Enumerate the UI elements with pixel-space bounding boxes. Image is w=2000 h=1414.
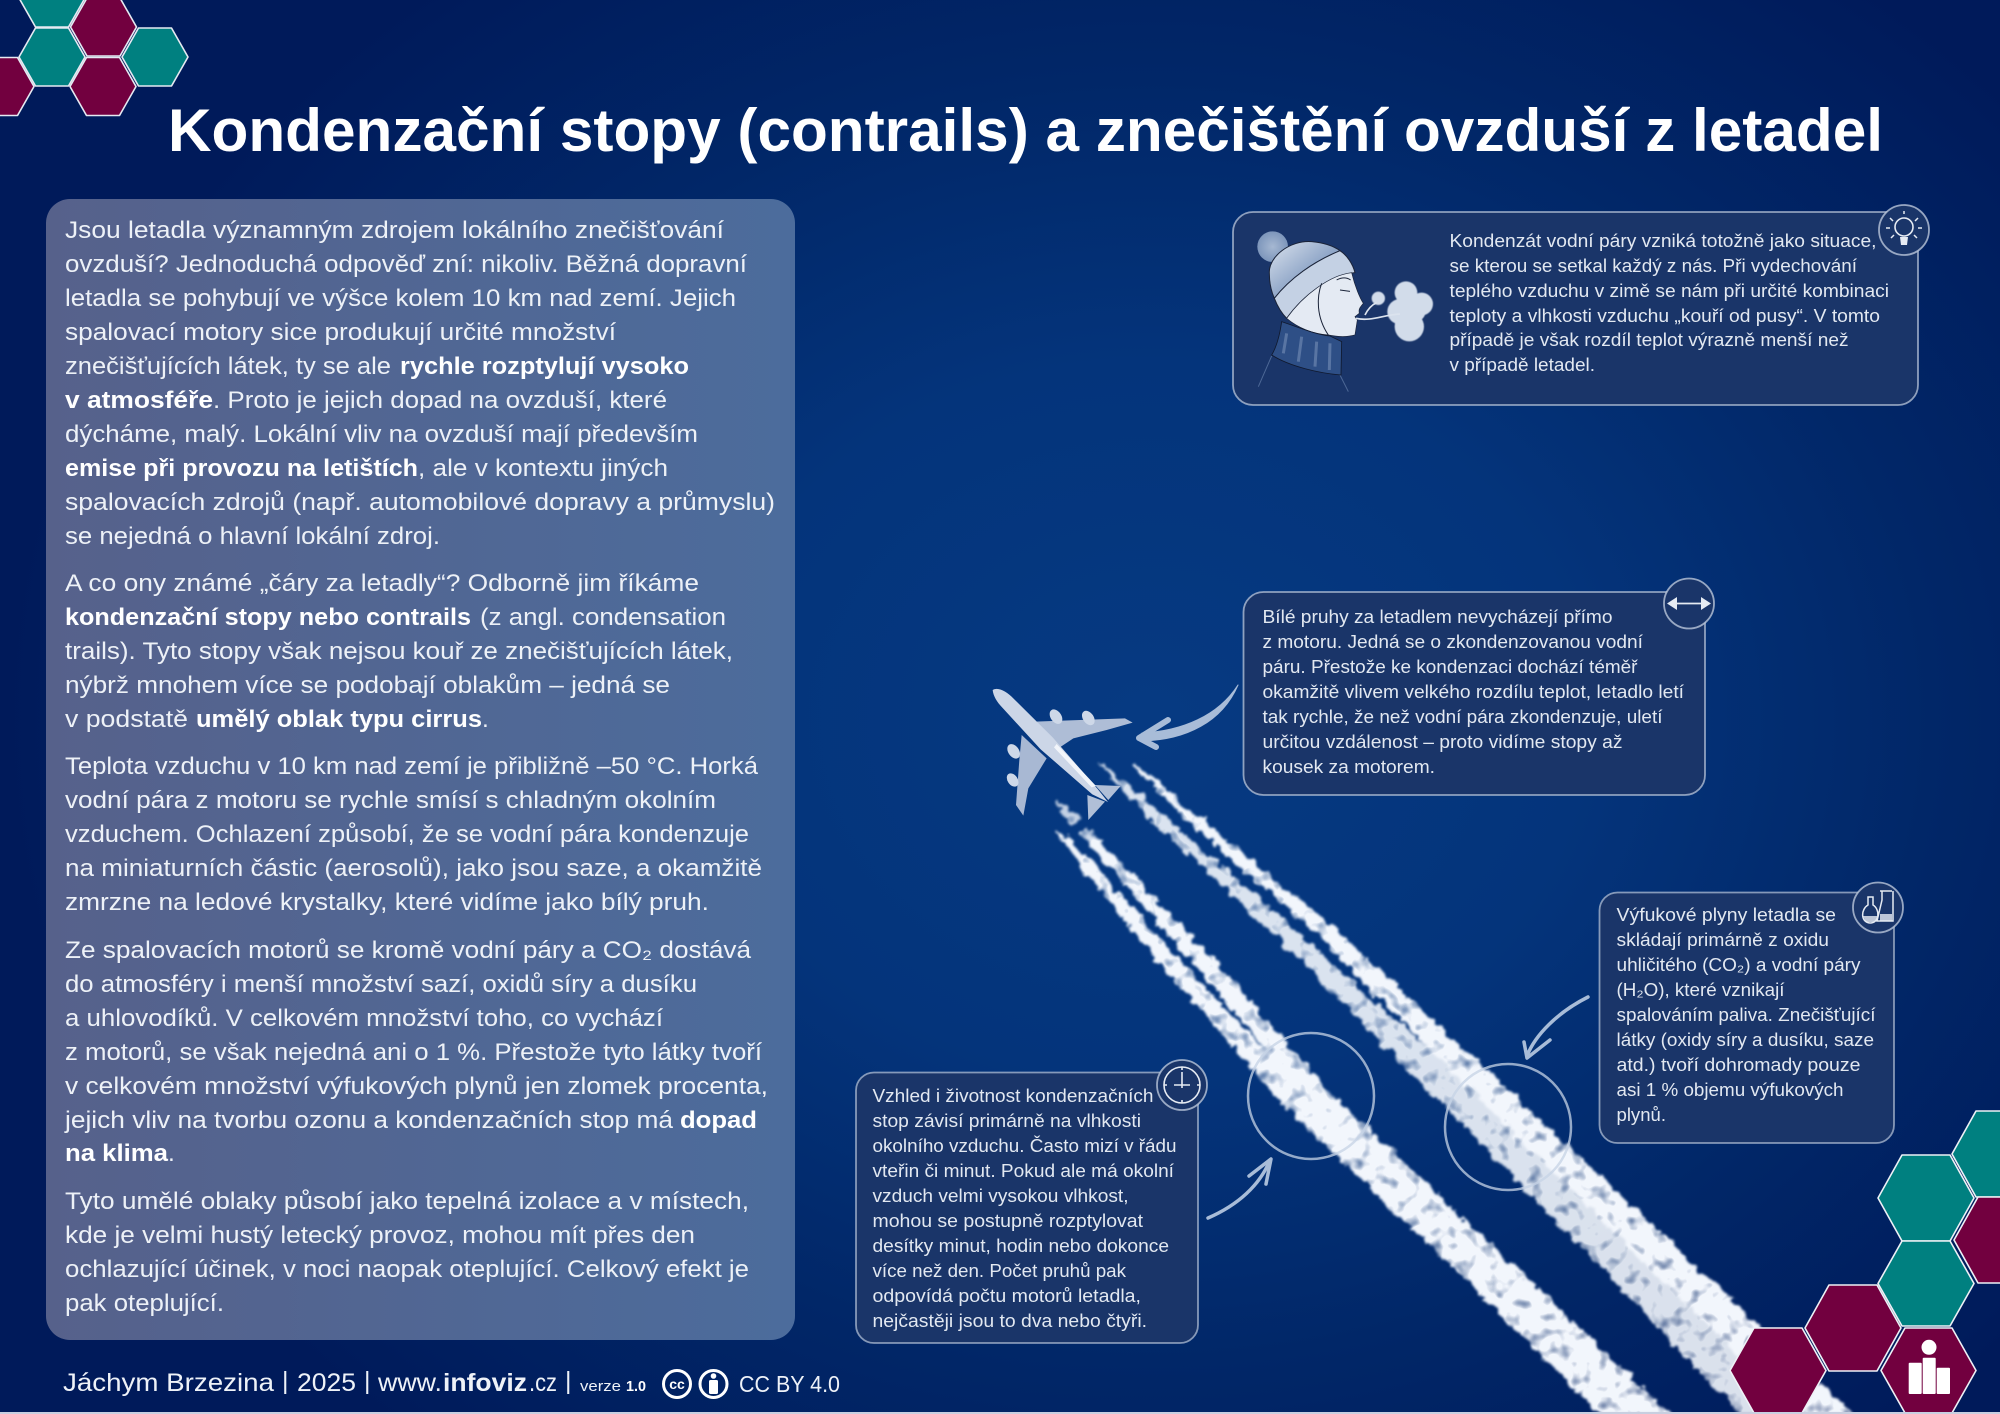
footer: | [565, 1367, 572, 1395]
text: se kterou se setkal každý z nás. Při vydechování [1450, 256, 1857, 276]
title: Kondenzační stopy (contrails) a znečištění ovzduší z letadel [168, 97, 1883, 164]
text: tak rychle, že než vodní pára zkondenzuje, uletí [1262, 707, 1662, 727]
fuselage [993, 689, 1108, 802]
hexagons: bottom right [1730, 1111, 2000, 1413]
paragraph: contrails definition: (z angl. condensation [480, 604, 726, 631]
paragraph: climate effect [65, 1188, 749, 1317]
icon: chemistry flasks [1853, 882, 1903, 932]
text: v případě letadel. [1450, 355, 1595, 375]
paragraph: emissions [64, 937, 768, 1167]
text: Výfukové plyny letadla se [1616, 905, 1836, 925]
callout: lifetime of contrails [856, 1060, 1207, 1343]
paragraph: temperature: Teplota vzduchu v 10 km nad zemí je přibližně –50 °C. Horká [65, 753, 758, 780]
text: Kondenzát vodní páry vzniká totožně jako situace, [1450, 231, 1876, 251]
text [1262, 607, 1684, 777]
text: teploty a vlhkosti vzduchu „kouří od pusy“. V tomto [1450, 306, 1880, 326]
paragraph: temperature: zmrzne na ledové krystalky, které vidíme jako bílý pruh. [65, 889, 709, 916]
text: mohou se postupně rozptylovat [872, 1211, 1143, 1231]
text: asi 1 % objemu výfukových [1616, 1080, 1844, 1100]
text [872, 1086, 1176, 1331]
text: páru. Přestože ke kondenzaci dochází téměř [1262, 657, 1639, 677]
paragraph: temperature: na miniaturních částic (aerosolů), jako jsou saze, a okamžitě [65, 855, 762, 882]
text: Bílé pruhy za letadlem nevycházejí přímo [1262, 607, 1612, 627]
text: látky (oxidy síry a dusíku, saze [1616, 1030, 1874, 1050]
paragraph: emissions: a uhlovodíků. V celkovém množství toho, co vychází [65, 1005, 663, 1032]
right wing [1035, 718, 1133, 748]
paragraph: local pollution: spalovací motory sice produkují určité množství [65, 319, 616, 346]
footer: | [364, 1367, 370, 1395]
paragraph: contrails definition: umělý oblak typu cirrus [196, 706, 482, 733]
callout: exhaust composition [1600, 882, 1903, 1143]
paragraph: local pollution: . Proto je jejich dopad na ovzduší, které [213, 387, 667, 414]
illustration: person exhaling in winter [1257, 231, 1433, 392]
callout: white stripes [1244, 578, 1714, 795]
paragraph: emissions: z motorů, se však nejedná ani o 1 %. Přestože tyto látky tvoří [65, 1039, 762, 1066]
text: (H₂O), které vznikají [1616, 980, 1784, 1000]
text: spalováním paliva. Znečišťující [1616, 1005, 1876, 1025]
footer: 2025 [297, 1369, 356, 1397]
paragraph: local pollution: v atmosféře [65, 387, 213, 414]
paragraph: emissions: do atmosféry i menší množství sazí, oxidů síry a dusíku [65, 971, 697, 998]
text: uhličitého (CO₂) a vodní páry [1616, 955, 1860, 975]
paragraph: contrails definition: A co ony známé „čáry za letadly“? Odborně jim říkáme [65, 570, 699, 597]
paragraph: local pollution: spalovacích zdrojů (např. automobilové dopravy a průmyslu) [65, 489, 775, 516]
text: Vzhled i životnost kondenzačních [872, 1086, 1154, 1106]
text: skládají primárně z oxidu [1616, 930, 1829, 950]
text: více než den. Počet pruhů pak [872, 1261, 1127, 1281]
hexagons: top left [0, 0, 188, 116]
arrow: to right circle [1524, 997, 1588, 1058]
paragraph: contrails definition: v podstatě [65, 706, 188, 733]
icon: light bulb [1879, 205, 1929, 255]
arrow: to airplane [1139, 685, 1238, 747]
left wing [1016, 735, 1047, 816]
icon: creative commons [664, 1370, 690, 1398]
paragraph: local pollution: emise při provozu na letištích [65, 455, 418, 482]
paragraph: contrails definition: kondenzační stopy nebo contrails [65, 604, 471, 631]
paragraph: temperature: vodní pára z motoru se rychle smísí s chladným okolním [65, 787, 716, 814]
paragraph: emissions: dopad [680, 1107, 757, 1134]
paragraph: climate effect: pak oteplující. [65, 1290, 224, 1317]
paragraph: contrails definition [65, 570, 733, 733]
paragraph: climate effect: Tyto umělé oblaky působí jako tepelná izolace a v místech, [65, 1188, 749, 1215]
text: desítky minut, hodin nebo dokonce [872, 1236, 1169, 1256]
paragraph: contrails definition: trails). Tyto stopy však nejsou kouř ze znečišťujících látek, [65, 638, 733, 665]
paragraph: local pollution: znečišťujících látek, ty se ale [65, 353, 391, 380]
paragraph: local pollution: rychle rozptylují vysoko [400, 353, 689, 380]
text [1616, 905, 1876, 1125]
paragraph: local pollution [65, 217, 775, 550]
text: okamžitě vlivem velkého rozdílu teplot, letadlo letí [1262, 682, 1684, 702]
paragraph: local pollution: letadla se pohybují ve výšce kolem 10 km nad zemí. Jejich [65, 285, 736, 312]
footer: CC BY 4.0 [739, 1371, 840, 1397]
logo hexagon [1881, 1328, 1976, 1413]
paragraph: local pollution: Jsou letadla významným zdrojem lokálního znečišťování [65, 217, 724, 244]
icon: clock [1157, 1060, 1207, 1110]
icon: double arrow [1664, 578, 1714, 628]
paragraph: climate effect: kde je velmi hustý letecký provoz, mohou mít přes den [65, 1222, 695, 1249]
paragraph: local pollution: , ale v kontextu jiných [418, 455, 668, 482]
callout: exhaling analogy [1233, 205, 1929, 405]
text: nejčastěji jsou to dva nebo čtyři. [872, 1311, 1147, 1331]
text: kousek za motorem. [1262, 757, 1435, 777]
paragraph: emissions: . [168, 1140, 175, 1167]
text: plynů. [1616, 1105, 1666, 1125]
focus circle: left [1248, 1033, 1374, 1159]
airplane [993, 689, 1133, 820]
contrails [1054, 762, 1854, 1414]
text [1450, 231, 1889, 375]
paragraph: local pollution: ovzduší? Jednoduchá odpověď zní: nikoliv. Běžná dopravní [65, 251, 747, 278]
footer: | [282, 1367, 288, 1395]
icon: creative commons: cc [669, 1376, 685, 1392]
paragraph: temperature: vzduchem. Ochlazení způsobí, že se vodní pára kondenzuje [65, 821, 749, 848]
paragraph: emissions: na klima [65, 1140, 168, 1167]
text: vteřin či minut. Pokud ale má okolní [872, 1161, 1174, 1181]
footer: .cz [529, 1369, 557, 1397]
footer: infoviz [443, 1369, 527, 1397]
text: případě je však rozdíl teplot výrazně menší než [1450, 330, 1848, 350]
panel: main text [46, 199, 795, 1340]
tail stabilisers [1087, 785, 1121, 820]
text: vzduch velmi vysokou vlhkost, [872, 1186, 1128, 1206]
footer: www. [377, 1369, 442, 1397]
footer [63, 1367, 840, 1398]
paragraph: contrails definition: . [482, 706, 489, 733]
text: atd.) tvoří dohromady pouze [1616, 1055, 1860, 1075]
paragraph: contrails definition: nýbrž mnohem více se podobají oblakům – jedná se [65, 672, 670, 699]
text: určitou vzdálenost – proto vidíme stopy až [1262, 732, 1622, 752]
engines [1004, 707, 1097, 789]
paragraph: climate effect: ochlazující účinek, v noci naopak oteplující. Celkový efekt je [65, 1256, 749, 1283]
text: z motoru. Jedná se o zkondenzovanou vodní [1262, 632, 1643, 652]
paragraph: emissions: v celkovém množství výfukových plynů jen zlomek procenta, [65, 1073, 768, 1100]
text: stop závisí primárně na vlhkosti [872, 1111, 1141, 1131]
paragraph: temperature [65, 753, 762, 916]
paragraph: local pollution: dýcháme, malý. Lokální vliv na ovzduší mají především [65, 421, 698, 448]
paragraph: emissions: jejich vliv na tvorbu ozonu a kondenzačních stop má [64, 1107, 673, 1134]
text: odpovídá počtu motorů letadla, [872, 1286, 1141, 1306]
focus circle: right [1445, 1064, 1571, 1190]
footer: Jáchym Brzezina [63, 1369, 274, 1397]
paragraph: emissions: Ze spalovacích motorů se kromě vodní páry a CO₂ dostává [65, 937, 751, 964]
footer: 1.0 [626, 1378, 646, 1395]
arrow: to left circle [1208, 1159, 1271, 1218]
text: okolního vzduchu. Často mizí v řádu [872, 1135, 1176, 1156]
text: teplého vzduchu v zimě se nám při určité kombinaci [1450, 281, 1889, 301]
icon: attribution [700, 1370, 727, 1398]
footer: verze [580, 1378, 621, 1395]
paragraph: local pollution: se nejedná o hlavní lokální zdroj. [65, 523, 440, 550]
